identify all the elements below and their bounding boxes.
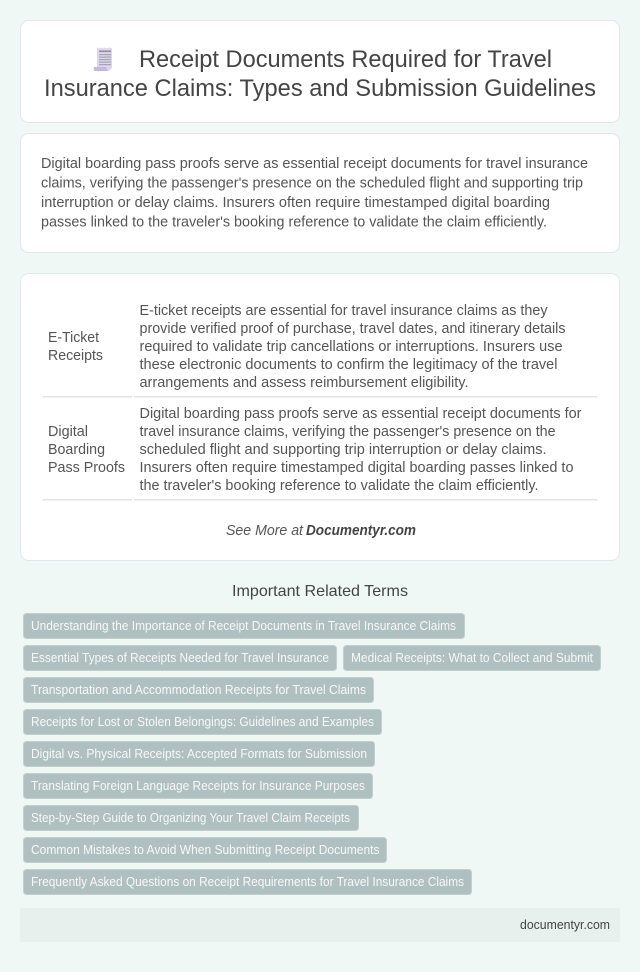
row: digital boarding pass proofs: travel insurance claims, verifying the passenger's presence on the [140,424,556,440]
tag [24,742,374,766]
tag [24,806,358,830]
tag: Transportation and Accommodation Receipts for Travel Claims [31,683,366,697]
panel: receipt types table [20,274,620,560]
row: digital boarding pass proofs [43,406,597,500]
row: e-ticket receipts: provide verified proof of purchase, travel dates, and itinerary details [140,321,566,337]
tag: Medical Receipts: What to Collect and Submit [351,651,593,665]
panel: header [20,20,620,122]
row: e-ticket receipts: arrangements and assess reimbursement eligibility. [140,375,468,391]
tag: Essential Types of Receipts Needed for Travel Insurance [31,651,329,665]
row: digital boarding pass proofs: Pass Proofs [48,460,125,476]
row: e-ticket receipts: E-ticket receipts are essential for travel insurance claims as they [140,303,548,319]
summary text: passes linked to the traveler's booking reference to validate the claim efficiently. [41,214,547,230]
see more link [226,523,416,539]
tag: Digital vs. Physical Receipts: Accepted Formats for Submission [31,747,367,761]
see more link: Documentyr.com [306,523,416,539]
footer: documentyr.com [520,917,610,932]
summary text [41,155,588,230]
tag: Receipts for Lost or Stolen Belongings: Guidelines and Examples [31,715,374,729]
tag: Step-by-Step Guide to Organizing Your Travel Claim Receipts [31,811,350,825]
tag: Common Mistakes to Avoid When Submitting Receipt Documents [31,843,380,857]
summary text: Digital boarding pass proofs serve as essential receipt documents for travel insurance [41,155,588,172]
row: digital boarding pass proofs: Boarding [48,442,105,458]
title [44,46,596,102]
row: e-ticket receipts: these electronic documents to confirm the legitimacy of the travel [140,357,558,373]
title: Receipt Documents Required for Travel [139,46,552,73]
tag [24,614,464,638]
footer [20,908,620,942]
tag [24,774,372,798]
row: e-ticket receipts: required to validate trip cancellations or interruptions. Insurers use [140,339,562,355]
panel: summary [20,134,620,252]
tag [24,678,374,702]
summary text: claims, verifying the passenger's presence on the scheduled flight and supporting trip [41,174,583,192]
tag [24,838,386,862]
summary text: interruption or delay claims. Insurers often require timestamped digital boarding [41,194,550,211]
tag: Translating Foreign Language Receipts for Insurance Purposes [31,779,365,793]
see more link: See More at [226,523,304,539]
tag: Frequently Asked Questions on Receipt Requirements for Travel Insurance Claims [31,875,464,889]
row: e-ticket receipts: E-Ticket [48,330,99,346]
row: digital boarding pass proofs: Digital boarding pass proofs serve as essential receipt documents for [140,406,582,422]
tag [344,646,600,670]
icon: receipt [94,48,112,71]
row: e-ticket receipts: Receipts [48,348,103,364]
row: e-ticket receipts [43,303,597,398]
title: Insurance Claims: Types and Submission Guidelines [44,75,596,102]
related terms tags [24,614,600,894]
row: digital boarding pass proofs: the traveler's booking reference to validate the claim efficiently. [140,478,538,494]
tag [24,870,472,894]
heading: important related terms: Important Related Terms [232,583,408,600]
row: digital boarding pass proofs: Insurers often require timestamped digital boarding passes linked to [140,460,574,476]
tag [24,710,382,734]
row: digital boarding pass proofs: scheduled flight and supporting trip interruption or delay claims. [140,442,546,458]
row: digital boarding pass proofs: Digital [48,424,88,440]
tag [24,646,336,670]
tag: Understanding the Importance of Receipt Documents in Travel Insurance Claims [31,619,456,633]
